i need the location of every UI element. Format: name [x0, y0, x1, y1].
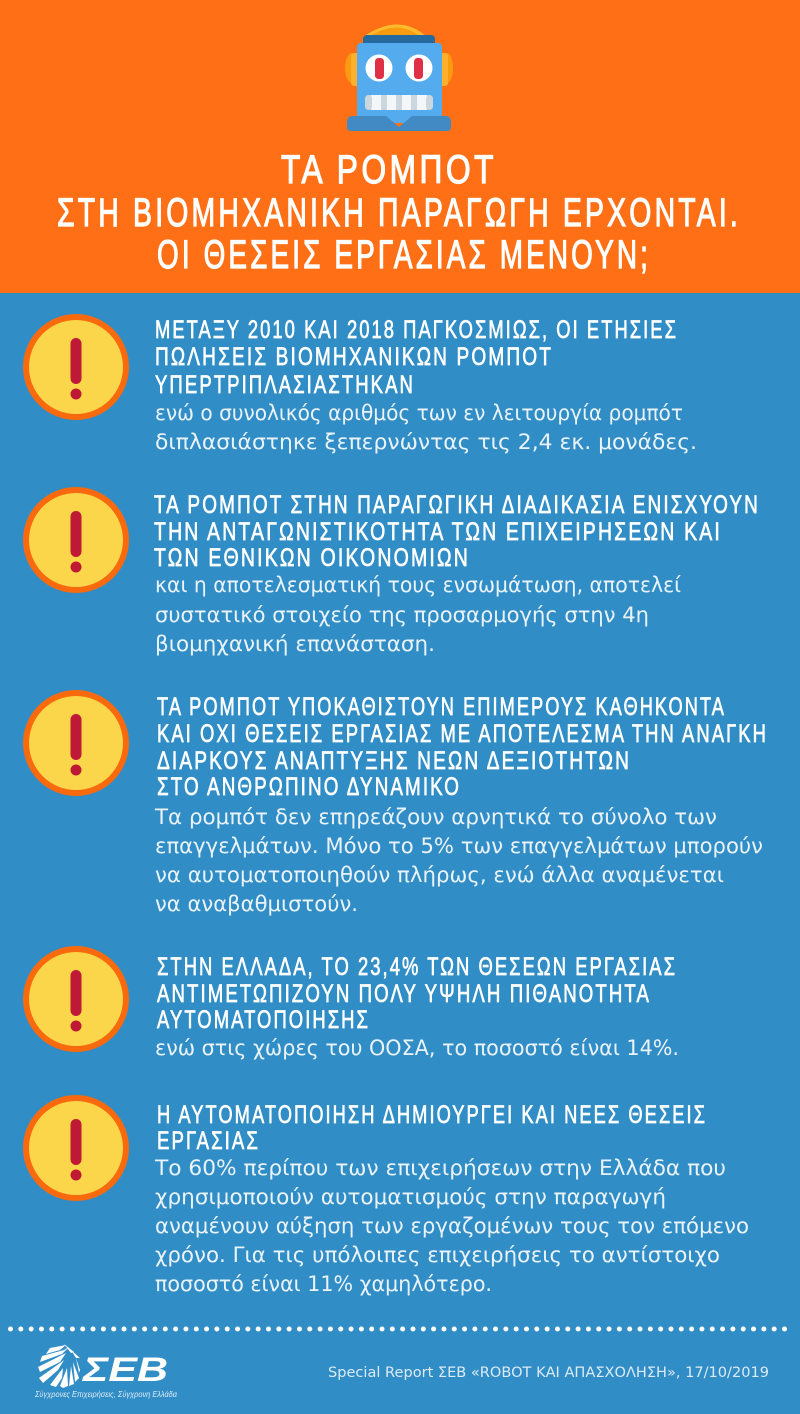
heading: new jobs: ΕΡΓΑΣΙΑΣ: [157, 1127, 260, 1155]
icon: alert: [26, 693, 126, 793]
body text: tasks: να αναβαθμιστούν.: [155, 892, 358, 916]
heading: new jobs: [157, 1101, 707, 1155]
body text: tasks: να αυτοματοποιηθούν πλήρως, ενώ άλλα αναμένεται: [155, 863, 724, 887]
title: [57, 148, 741, 277]
body text: sales: ενώ ο συνολικός αριθμός των εν λειτουργία ρομπότ: [155, 401, 683, 425]
panel: sales of robots: [26, 316, 697, 454]
panel: new jobs: [26, 1098, 749, 1296]
panel: competitiveness: [26, 490, 760, 656]
logo: ΣΕΒ: ΣΕΒ: [82, 1351, 168, 1389]
heading: competitiveness: ΤΩΝ ΕΘΝΙΚΩΝ ΟΙΚΟΝΟΜΙΩΝ: [154, 544, 470, 572]
heading: tasks: ΣΤΟ ΑΝΘΡΩΠΙΝΟ ΔΥΝΑΜΙΚΟ: [157, 773, 461, 801]
heading: Greece: [157, 953, 677, 1034]
body text: competitiveness: βιομηχανική επανάσταση.: [155, 632, 435, 656]
heading: sales: ΥΠΕΡΤΡΙΠΛΑΣΙΑΣΤΗΚΑΝ: [155, 371, 415, 399]
body text: competitiveness: συστατικό στοιχείο της προσαρμογής στην 4η: [155, 603, 649, 627]
icon: alert: [26, 490, 126, 590]
body text: new jobs: Το 60% περίπου των επιχειρήσεων στην Ελλάδα που: [154, 1156, 726, 1180]
icon: alert: [26, 317, 126, 417]
icon: robot head: [345, 24, 453, 131]
source note: Special Report ΣΕΒ «ROBOT ΚΑΙ ΑΠΑΣΧΟΛΗΣΗ», 17/10/2019: [328, 1365, 769, 1381]
body text: competitiveness: και η αποτελεσματική τους ενσωμάτωση, αποτελεί: [155, 573, 681, 597]
body text: sales: διπλασιάστηκε ξεπερνώντας τις 2,4 εκ. μονάδες.: [155, 430, 697, 454]
panel: tasks not jobs: [26, 693, 768, 916]
heading: competitiveness: [154, 491, 760, 572]
heading: Greece: ΑΥΤΟΜΑΤΟΠΟΙΗΣΗΣ: [157, 1006, 370, 1034]
body text: tasks: [154, 805, 763, 916]
body text: Greece: ενώ στις χώρες του ΟΟΣΑ, το ποσοστό είναι 14%.: [155, 1036, 679, 1060]
body text: new jobs: χρόνο. Για τις υπόλοιπες επιχειρήσεις το αντίστοιχο: [155, 1243, 720, 1267]
body text: tasks: επαγγελμάτων. Μόνο το 5% των επαγγελμάτων μπορούν: [155, 834, 763, 858]
heading: Greece: ΑΝΤΙΜΕΤΩΠΙΖΟΥΝ ΠΟΛΥ ΥΨΗΛΗ ΠΙΘΑΝΟΤΗΤΑ: [157, 980, 651, 1008]
panel: Greece automation risk: [26, 949, 679, 1060]
body text: new jobs: χρησιμοποιούν αυτοματισμούς στην παραγωγή: [155, 1185, 666, 1209]
body text: competitiveness: [155, 573, 681, 656]
heading: sales: [155, 316, 678, 399]
body text: sales: [155, 401, 697, 454]
heading: tasks: ΔΙΑΡΚΟΥΣ ΑΝΑΠΤΥΞΗΣ ΝΕΩΝ ΔΕΞΙΟΤΗΤΩΝ: [157, 747, 631, 775]
title: ΤΑ ΡΟΜΠΟΤ: [281, 148, 497, 192]
body text: new jobs: αναμένουν αύξηση των εργαζομένων τους τον επόμενο: [155, 1214, 749, 1238]
logo: ΣΕΒ: Σύγχρονες Επιχειρήσεις, Σύγχρονη Ελλάδα: [34, 1390, 177, 1399]
icon: alert: [26, 1098, 126, 1198]
heading: sales: ΠΩΛΗΣΕΙΣ ΒΙΟΜΗΧΑΝΙΚΩΝ ΡΟΜΠΟΤ: [155, 343, 553, 371]
icon: alert: [26, 949, 126, 1049]
body text: new jobs: [154, 1156, 749, 1296]
icon: sunburst: [38, 1344, 80, 1388]
header banner: [0, 0, 800, 293]
heading: tasks: [157, 693, 768, 801]
body text: new jobs: ποσοστό είναι 11% χαμηλότερο.: [155, 1272, 492, 1296]
logo: ΣΕΒ: [34, 1344, 177, 1399]
body text: tasks: Τα ρομπότ δεν επηρεάζουν αρνητικά το σύνολο των: [154, 805, 717, 829]
page background: [0, 0, 800, 293]
